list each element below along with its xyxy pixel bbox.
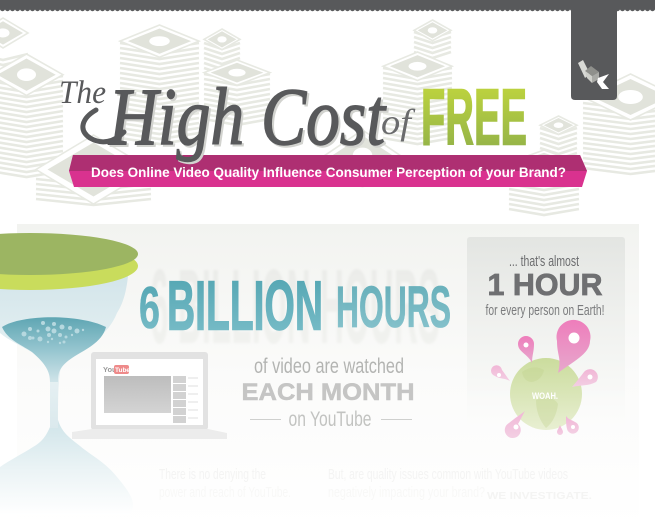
icon: logo cubes <box>578 60 609 89</box>
text: YouTube logo: You <box>103 365 117 374</box>
title: of: of <box>381 102 416 142</box>
logo tab <box>571 9 617 100</box>
text: BILLION: BILLION <box>167 266 323 344</box>
bottom bulb <box>0 420 133 515</box>
text: WOAH.: WOAH. <box>532 391 558 401</box>
text: HOURS: HOURS <box>336 275 451 340</box>
text: for every person on Earth: for every person on Earth! <box>486 303 604 319</box>
faded body text left: There is no denying the <box>159 466 266 483</box>
faded body text left: power and reach of YouTube. <box>159 484 291 501</box>
glass <box>0 276 128 428</box>
title shadow: High Cost: High Cost <box>110 73 389 164</box>
ribbon subtitle <box>69 155 587 187</box>
text: 6: 6 <box>139 275 160 341</box>
top sand <box>2 317 106 382</box>
faded body text left <box>159 466 291 501</box>
subtitle text: Does Online Video Quality Influence Consumer Perception of your Brand? <box>91 165 566 180</box>
text: of video are watched: of video are watched <box>254 355 404 378</box>
text: on YouTube: on YouTube <box>288 408 372 431</box>
panel: one hour box <box>467 237 625 452</box>
text: that's almost: ... that's almost <box>509 253 580 270</box>
hourglass <box>0 233 138 515</box>
title: High Cost: High Cost <box>108 71 387 162</box>
thumbnails <box>173 376 186 423</box>
title <box>59 71 527 164</box>
headline: 6 billion hours <box>139 248 451 366</box>
video screen <box>104 376 171 413</box>
text: EACH MONTH: EACH MONTH <box>242 379 414 406</box>
faded body text right: WE INVESTIGATE. <box>487 491 592 502</box>
bubbles <box>22 321 84 344</box>
faded body text right: negatively impacting your brand? <box>328 484 485 501</box>
laptop with YouTube page: Tube <box>115 367 130 374</box>
caption: of video watched each month <box>242 355 414 431</box>
money stacks background <box>0 18 655 215</box>
text: FREE <box>421 72 527 162</box>
icon: globe with pins <box>491 320 598 438</box>
text: 1 HOUR: 1 HOUR <box>488 267 602 302</box>
faded body text right <box>328 466 592 502</box>
top scalloped bar <box>0 0 655 12</box>
title: The: The <box>59 75 106 111</box>
panel: YouTube stats background <box>17 224 639 528</box>
laptop with YouTube page <box>72 352 227 439</box>
hourglass lid <box>0 233 138 290</box>
